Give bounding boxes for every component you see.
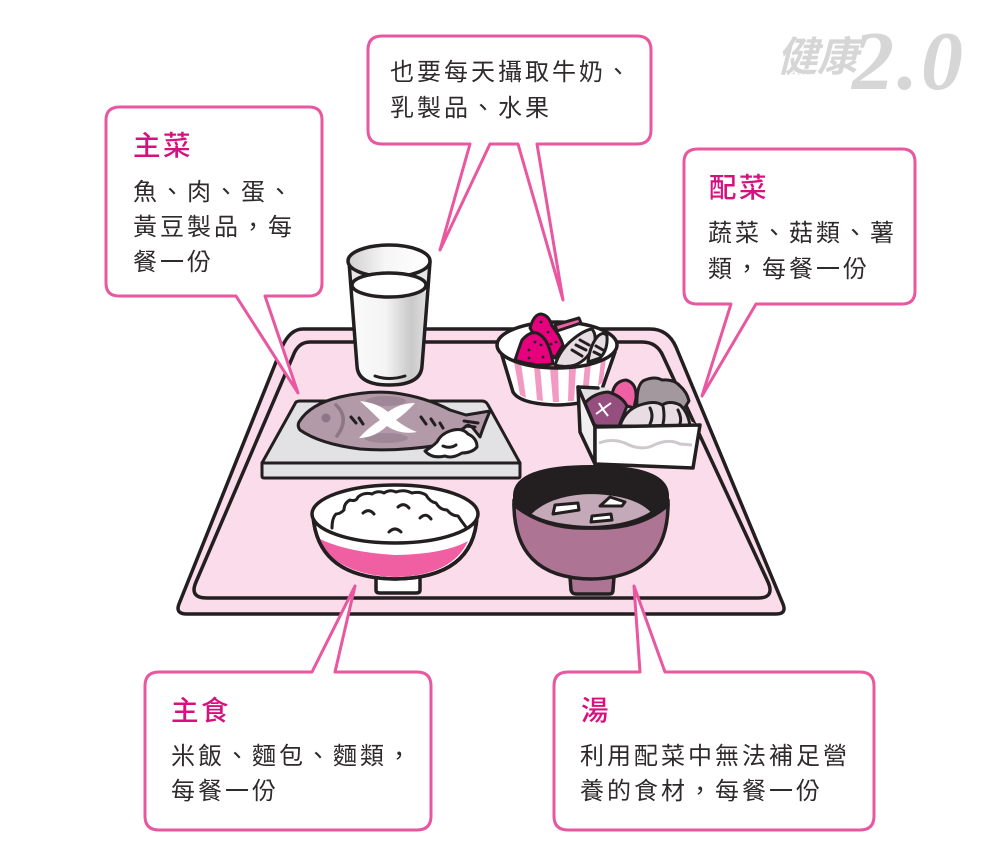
text: soup: 利用配菜中無法補足營 bbox=[580, 743, 850, 770]
text: milk, dairy and fruit: 乳製品、水果 bbox=[390, 95, 552, 122]
text: main dish: 黃豆製品，每 bbox=[133, 214, 295, 241]
text: side dish: 類，每餐一份 bbox=[708, 256, 870, 283]
heading: staple: 主食 bbox=[171, 695, 231, 726]
logo: Health 2.0 watermark: 2.0 bbox=[850, 15, 966, 108]
text: main dish bbox=[133, 179, 295, 276]
heading: side dish: 配菜 bbox=[709, 172, 769, 203]
callout: milk, dairy and fruit bbox=[368, 36, 651, 300]
callout: soup bbox=[554, 586, 874, 830]
callout: side dish bbox=[684, 149, 915, 396]
tray bbox=[178, 329, 784, 614]
text: soup: 養的食材，每餐一份 bbox=[580, 778, 823, 805]
logo: Health 2.0 watermark: 健康 bbox=[777, 23, 865, 83]
icon: miso soup bowl bbox=[513, 465, 669, 594]
text: staple bbox=[171, 743, 414, 805]
icon: glass of milk bbox=[348, 245, 430, 385]
text: soup bbox=[580, 743, 850, 805]
logo: Health 2.0 watermark: HEALTH bbox=[781, 71, 812, 77]
text: main dish: 魚、肉、蛋、 bbox=[133, 179, 295, 206]
callout: staple bbox=[145, 586, 431, 830]
callout: main dish bbox=[106, 107, 322, 393]
text: staple: 米飯、麵包、麵類， bbox=[171, 743, 414, 770]
text: milk, dairy and fruit bbox=[390, 59, 633, 122]
heading: soup: 湯 bbox=[581, 695, 611, 726]
text: side dish: 蔬菜、菇類、薯 bbox=[708, 220, 897, 247]
text: milk, dairy and fruit: 也要每天攝取牛奶、 bbox=[390, 59, 633, 86]
heading: main dish: 主菜 bbox=[133, 130, 193, 161]
text: staple: 每餐一份 bbox=[171, 778, 279, 805]
icon: rice bowl bbox=[312, 485, 478, 593]
icon: side dish box bbox=[578, 378, 700, 468]
text: side dish bbox=[708, 220, 897, 283]
icon: fruit bowl bbox=[497, 314, 617, 405]
text: main dish: 餐一份 bbox=[133, 249, 214, 276]
logo: Health 2.0 watermark bbox=[777, 15, 966, 108]
icon: fish on plate bbox=[262, 392, 520, 478]
